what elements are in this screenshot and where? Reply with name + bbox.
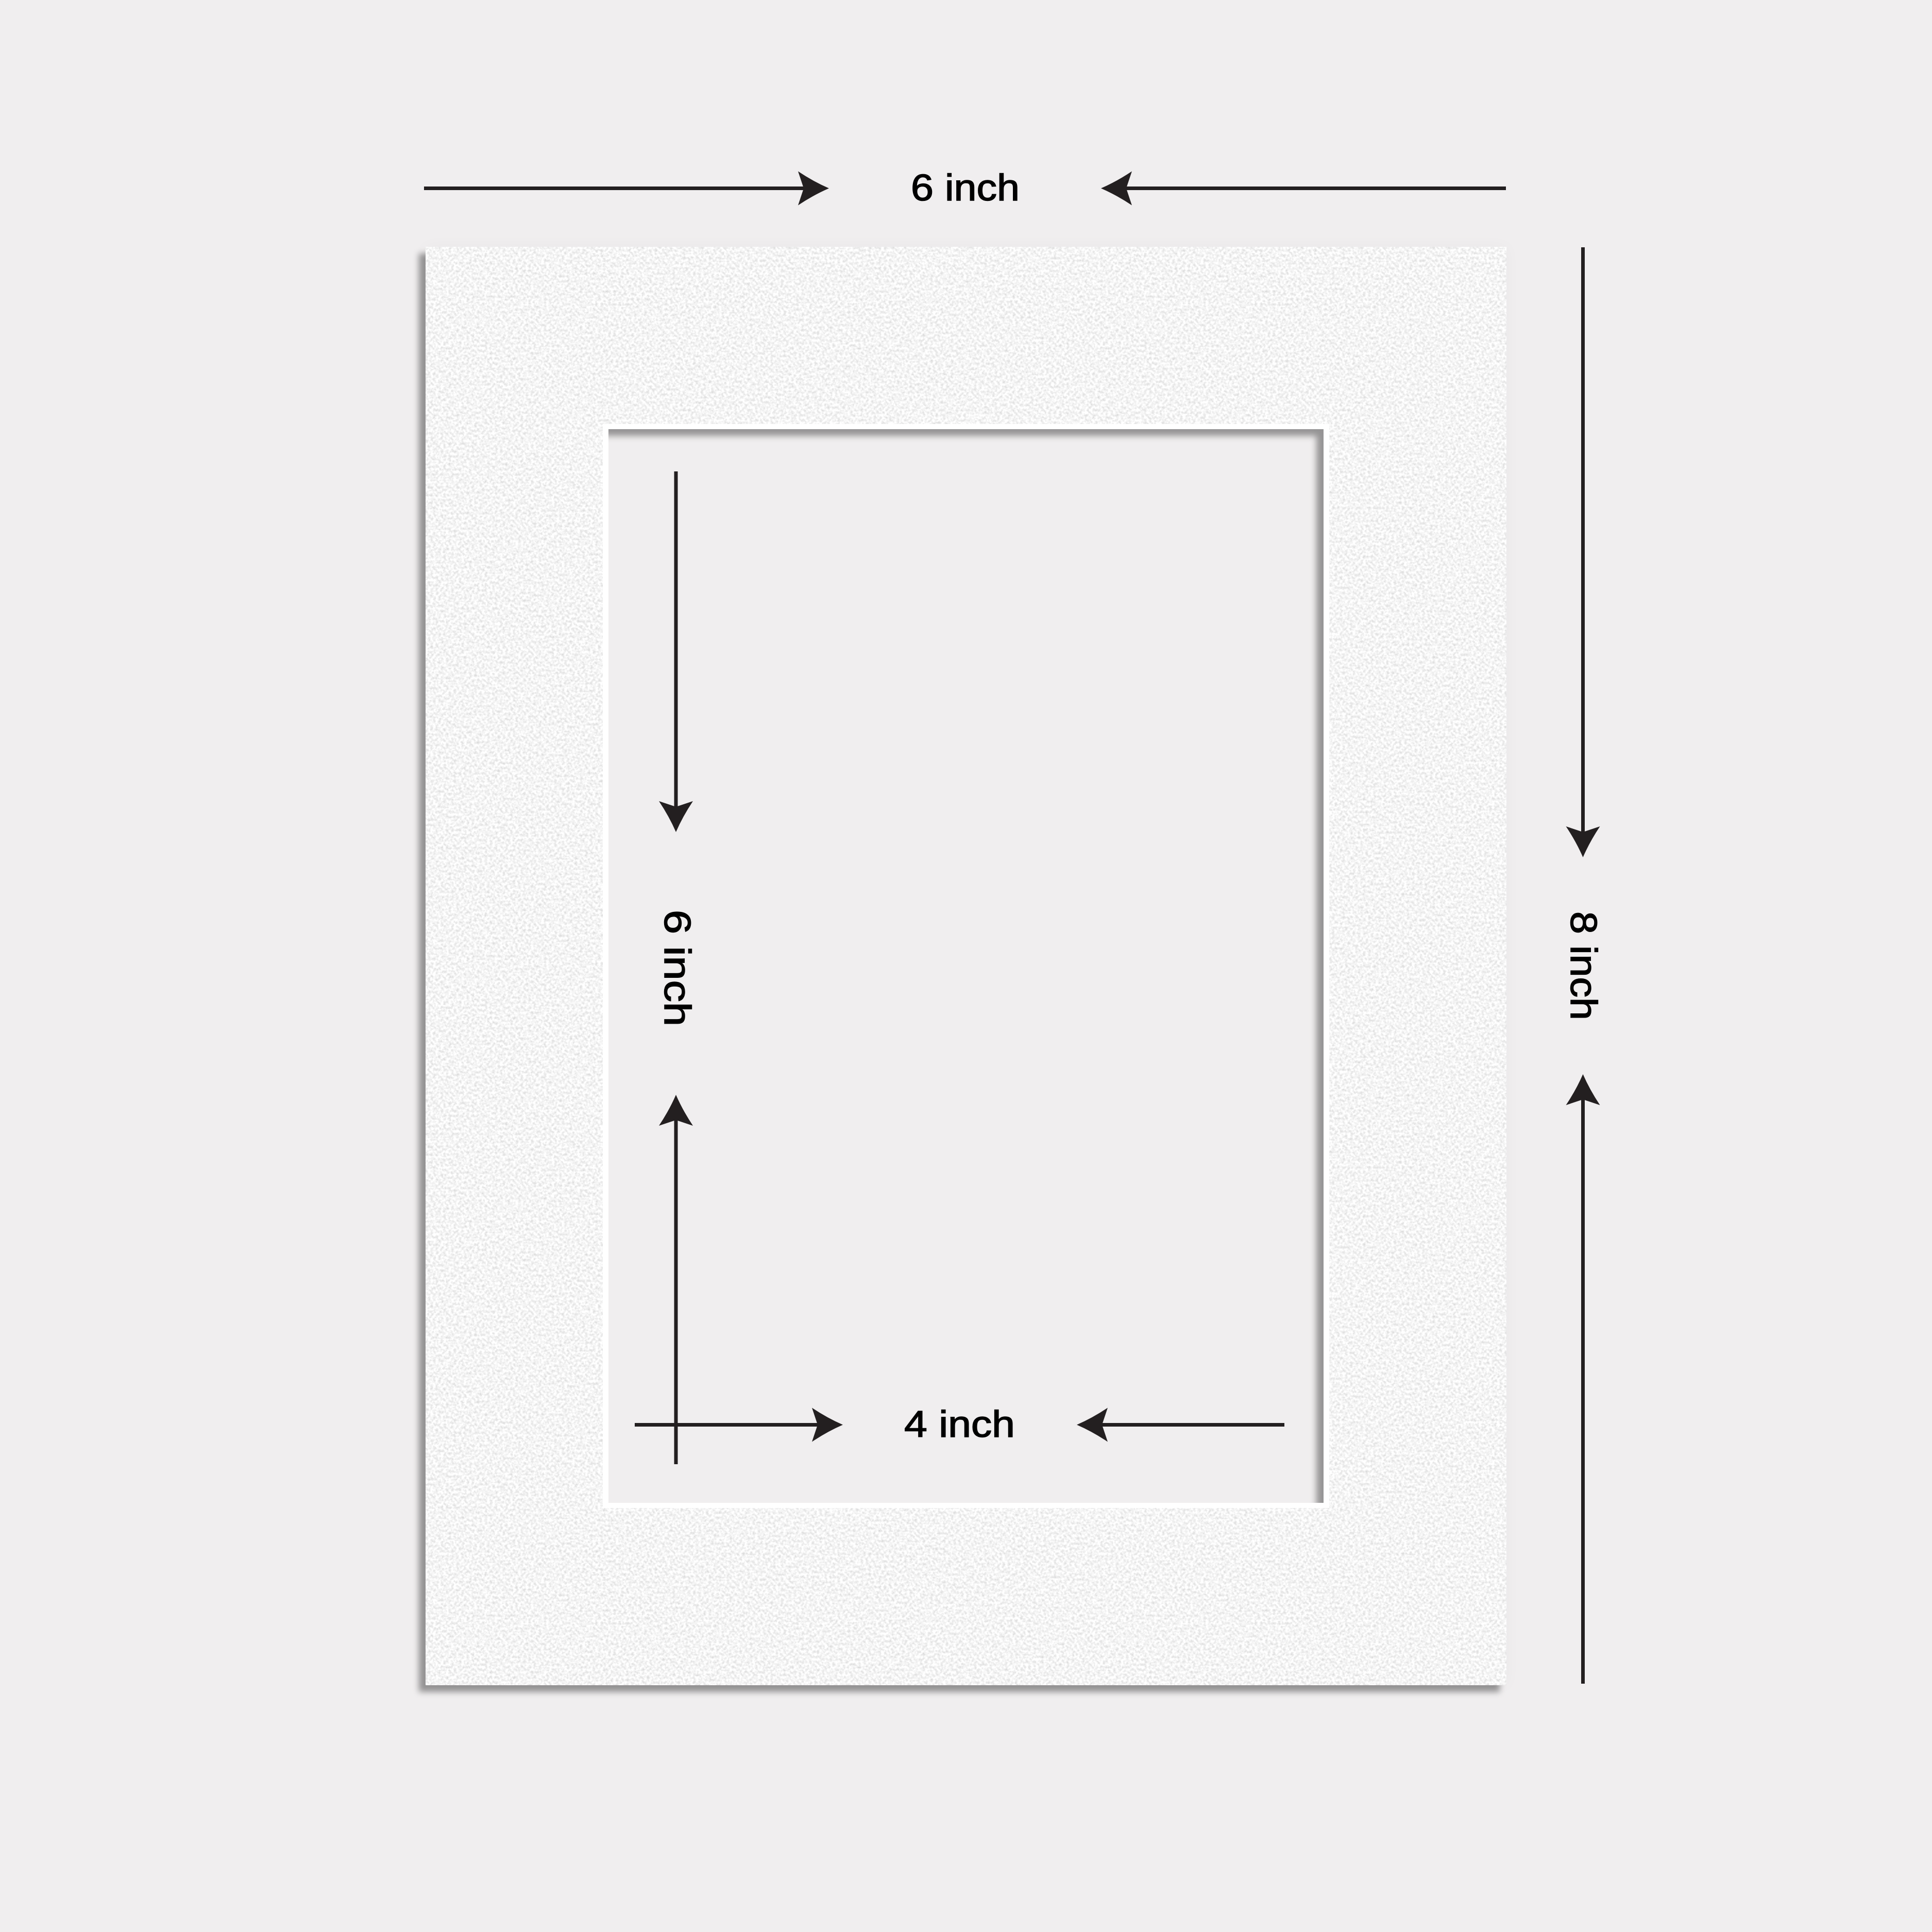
arrow: outer height, bottom: [1566, 1074, 1600, 1684]
arrow: inner height, top: [659, 471, 693, 832]
window opening with inner shadow: [608, 429, 1324, 1503]
panel: textured white photo mat: [426, 247, 1506, 1685]
label: 8 inch height: 8 inch: [1563, 911, 1604, 1020]
mat opening with white bevel: [603, 424, 1329, 1508]
arrow: inner width, left: [635, 1408, 843, 1442]
arrow: inner width, right: [1077, 1408, 1284, 1442]
label: inner 6 inch height: 6 inch: [656, 910, 698, 1026]
arrow: inner height, bottom: [659, 1095, 693, 1464]
label: 4 inch width: 4 inch: [904, 1404, 1015, 1445]
arrow: outer height, top: [1566, 247, 1600, 857]
arrow: top width, right: [1101, 171, 1506, 205]
arrow: top width, left: [424, 171, 829, 205]
label: 6 inch width: 6 inch: [911, 167, 1020, 209]
